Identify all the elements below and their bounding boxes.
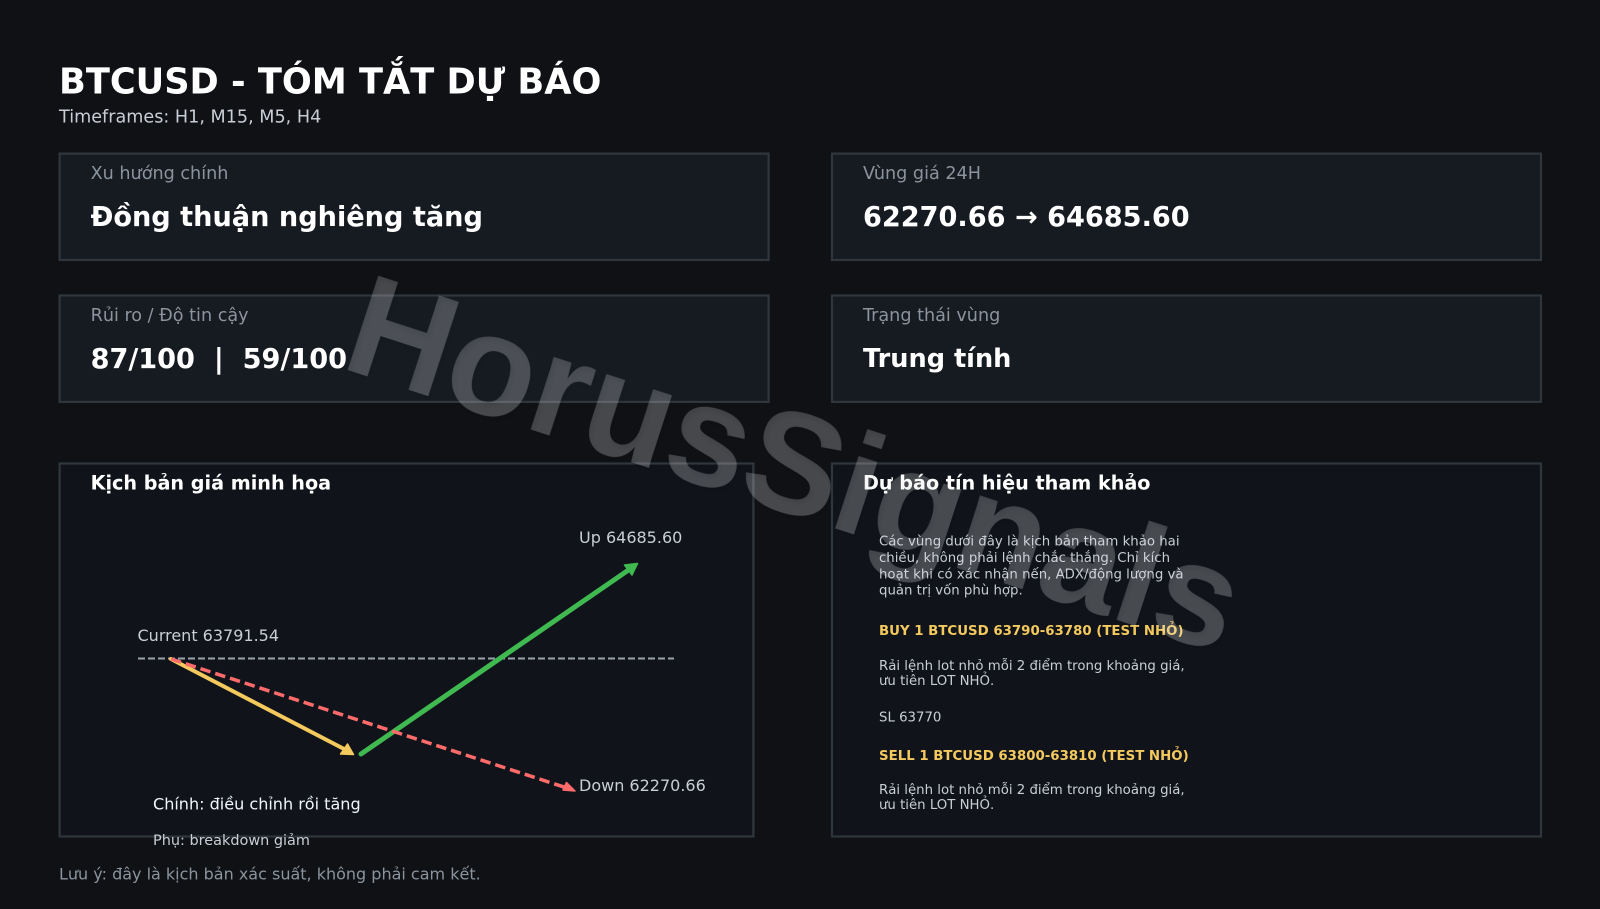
- buy details: ưu tiên LOT NHỎ.: [879, 670, 994, 689]
- panel: risk and confidence: Rủi ro / Độ tin cậy: [91, 306, 249, 326]
- buy signal: BUY 1 BTCUSD 63790-63780 (TEST NHỎ): [879, 620, 1184, 639]
- intro paragraph: hoạt khi có xác nhận nến, ADX/động lượng và: [879, 566, 1184, 582]
- arrow: main correction: [171, 659, 354, 754]
- chart heading: Kịch bản giá minh họa: [91, 472, 331, 494]
- panel: zone status: [832, 296, 1541, 402]
- down label: Down 62270.66: [579, 776, 706, 795]
- panel: risk and confidence: 87/100 | 59/100: [91, 344, 347, 375]
- up label: Up 64685.60: [579, 528, 682, 547]
- current price line: [138, 658, 674, 660]
- footnote: Lưu ý: đây là kịch bản xác suất, không phải cam kết.: [59, 864, 481, 884]
- current price label: Current 63791.54: [138, 626, 279, 645]
- signal heading: Dự báo tín hiệu tham khảo: [863, 472, 1150, 494]
- sell details: Rải lệnh lot nhỏ mỗi 2 điểm trong khoảng giá,: [879, 781, 1185, 798]
- watermark: HorusSignals: [329, 243, 1261, 683]
- arrow: up scenario: [361, 564, 638, 754]
- sell signal: SELL 1 BTCUSD 63800-63810 (TEST NHỎ): [879, 745, 1189, 764]
- panel: main trend: [60, 154, 769, 260]
- buy details: Rải lệnh lot nhỏ mỗi 2 điểm trong khoảng giá,: [879, 657, 1185, 674]
- panel: zone status: Trạng thái vùng: [862, 306, 1000, 326]
- panel: signal forecast: [832, 464, 1541, 836]
- panel: main trend: Đồng thuận nghiêng tăng: [91, 202, 483, 233]
- sell details: ưu tiên LOT NHỎ.: [879, 794, 994, 813]
- subtitle: timeframes: Timeframes: H1, M15, M5, H4: [58, 108, 321, 128]
- intro paragraph: Các vùng dưới đây là kịch bản tham khảo hai: [879, 534, 1180, 550]
- arrow: down scenario: [171, 659, 575, 791]
- panel: zone status: Trung tính: [863, 344, 1011, 374]
- panel: risk and confidence: [60, 296, 769, 402]
- title: BTCUSD - TÓM TẮT DỰ BÁO: [59, 56, 601, 102]
- primary scenario label: Chính: điều chỉnh rồi tăng: [153, 794, 361, 814]
- panel: 24H price range: Vùng giá 24H: [863, 164, 981, 184]
- secondary scenario label: Phụ: breakdown giảm: [153, 833, 310, 849]
- panel: main trend: Xu hướng chính: [91, 164, 228, 184]
- panel: price scenario chart: [60, 464, 753, 849]
- intro paragraph: quản trị vốn phù hợp.: [879, 582, 1023, 598]
- panel: 24H price range: [832, 154, 1541, 260]
- intro paragraph: chiều, không phải lệnh chắc thắng. Chỉ kích: [879, 549, 1170, 566]
- stop loss: SL 63770: [879, 710, 941, 726]
- panel: 24H price range: 62270.66 → 64685.60: [863, 202, 1190, 233]
